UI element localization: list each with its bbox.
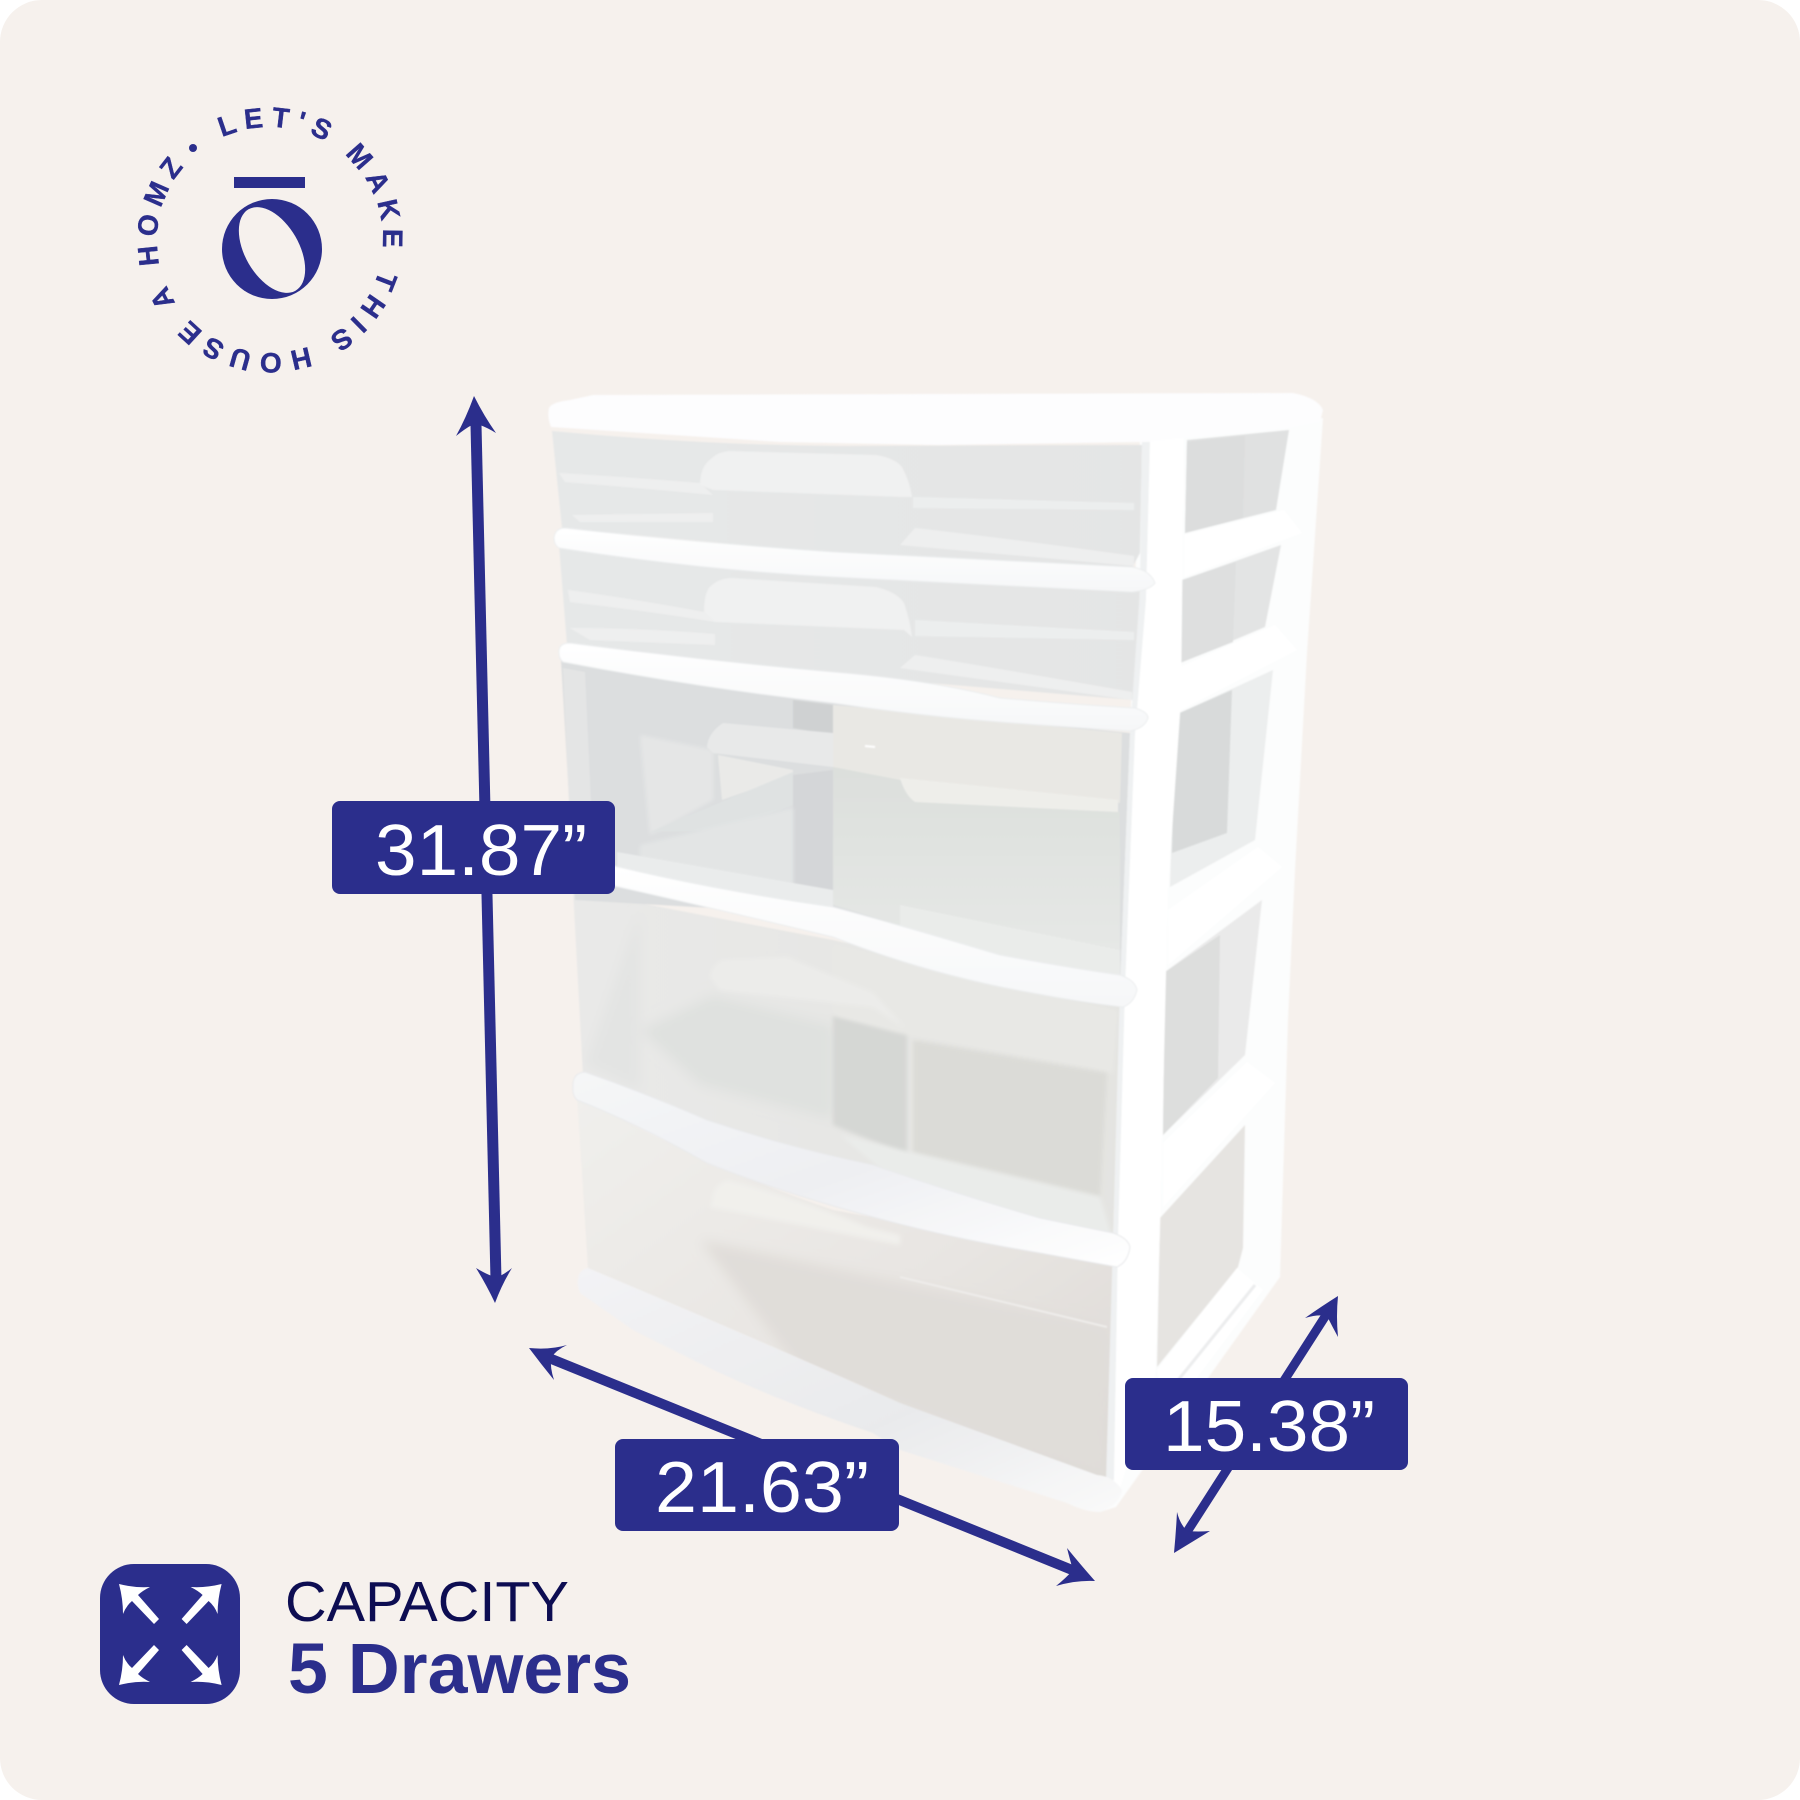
logo badge [138, 107, 403, 373]
icon: expand arrows [100, 1564, 240, 1704]
drawer 1 [552, 431, 1142, 568]
front post [1114, 438, 1184, 1500]
width arrow [529, 1345, 1095, 1586]
label: depth: 15.38” [1163, 1387, 1375, 1467]
drawer 4 [573, 890, 1120, 1240]
drawer rims [554, 528, 1155, 1267]
label: width: 21.63” [655, 1448, 869, 1528]
white frame right side [1100, 418, 1323, 1512]
label: height: 31.87” [375, 811, 587, 891]
capacity block [100, 1564, 631, 1709]
label: height [332, 801, 615, 894]
side panels [1157, 430, 1289, 1367]
label: depth [1125, 1378, 1408, 1470]
label: width [615, 1439, 899, 1531]
base rim [578, 1268, 1122, 1512]
capacity text: 5 Drawers [288, 1630, 631, 1709]
product photo: five drawer storage tower [548, 393, 1323, 1512]
logo circular slogan: LET'S MAKE THIS HOUSE A HOMZ [138, 107, 403, 373]
lid [548, 393, 1323, 445]
capacity text: CAPACITY [285, 1570, 569, 1634]
drawer 5 [577, 1095, 1116, 1480]
depth arrow [1174, 1296, 1338, 1553]
drawer frame strips [1106, 442, 1150, 1480]
drawer 2 [559, 545, 1140, 700]
capacity text [285, 1570, 631, 1709]
height arrow [456, 396, 512, 1303]
side rails [1157, 510, 1302, 1420]
drawer 3 [561, 660, 1130, 985]
logo mark: o with macron [222, 177, 322, 304]
